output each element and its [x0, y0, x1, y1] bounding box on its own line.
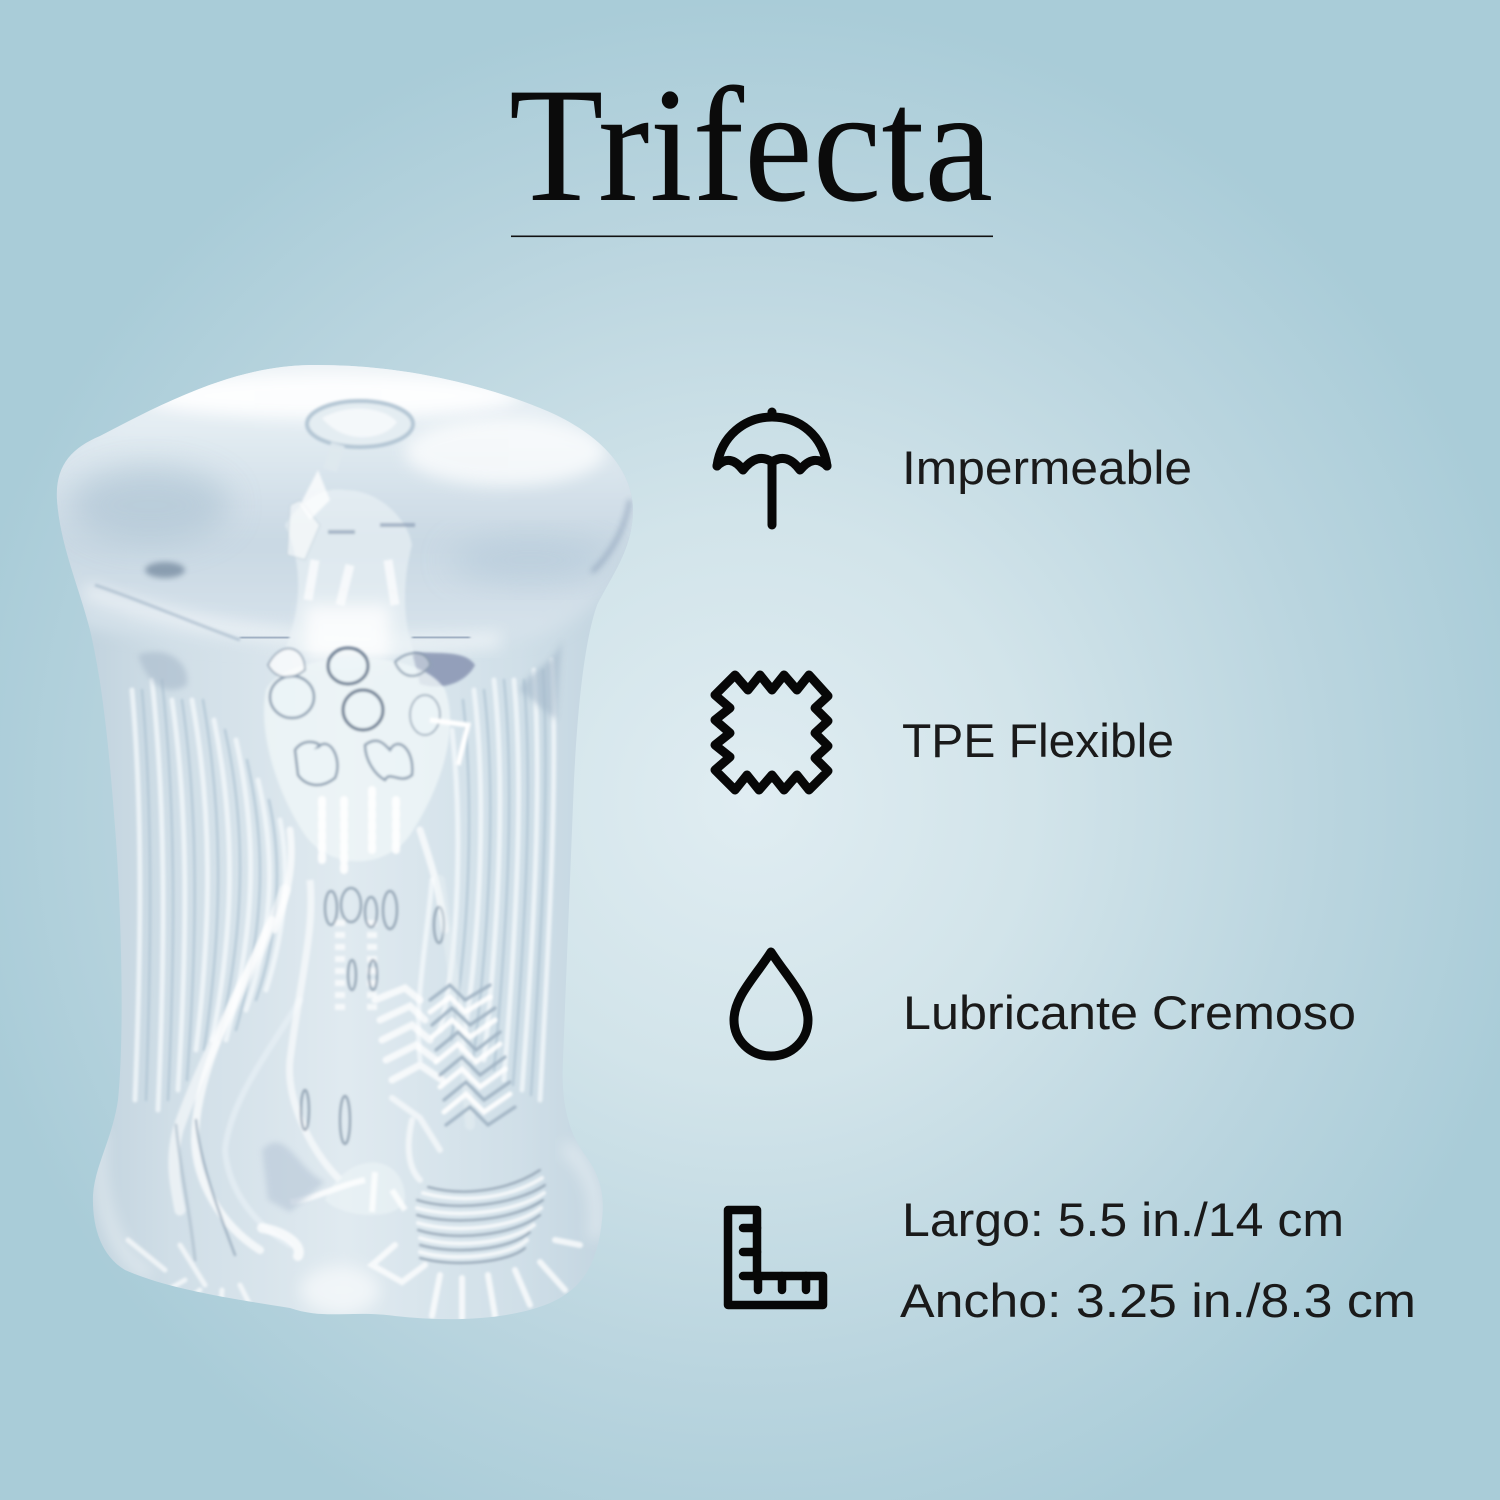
product right chamber with chevrons and thread [372, 880, 580, 1318]
icon: set square ruler [728, 1210, 823, 1305]
product dark window [262, 1143, 325, 1212]
icon: lubricant drop [734, 952, 808, 1056]
icon: stretch fabric square [715, 675, 828, 790]
product spine drips [275, 790, 445, 930]
title: Trifecta [509, 55, 993, 236]
label: dimensions: Ancho: 3.25 in./8.3 cm [900, 1274, 1416, 1327]
label: TPE Flexible: TPE Flexible [902, 714, 1174, 767]
product: clear sleeve [40, 350, 650, 1320]
product outer ribs [132, 660, 554, 1110]
product middle chamber [290, 880, 444, 1215]
product textured bulb [264, 648, 468, 861]
icon: umbrella [717, 412, 827, 525]
label: dimensions: Largo: 5.5 in./14 cm [902, 1193, 1344, 1246]
label: dimensions [900, 1193, 1416, 1327]
label: Lubricante Cremoso: Lubricante Cremoso [903, 986, 1356, 1039]
product centre spine [285, 401, 415, 660]
product left chamber [128, 890, 300, 1320]
product cap highlights [40, 350, 650, 720]
product base [99, 1130, 597, 1314]
label: Impermeable: Impermeable [902, 441, 1192, 494]
